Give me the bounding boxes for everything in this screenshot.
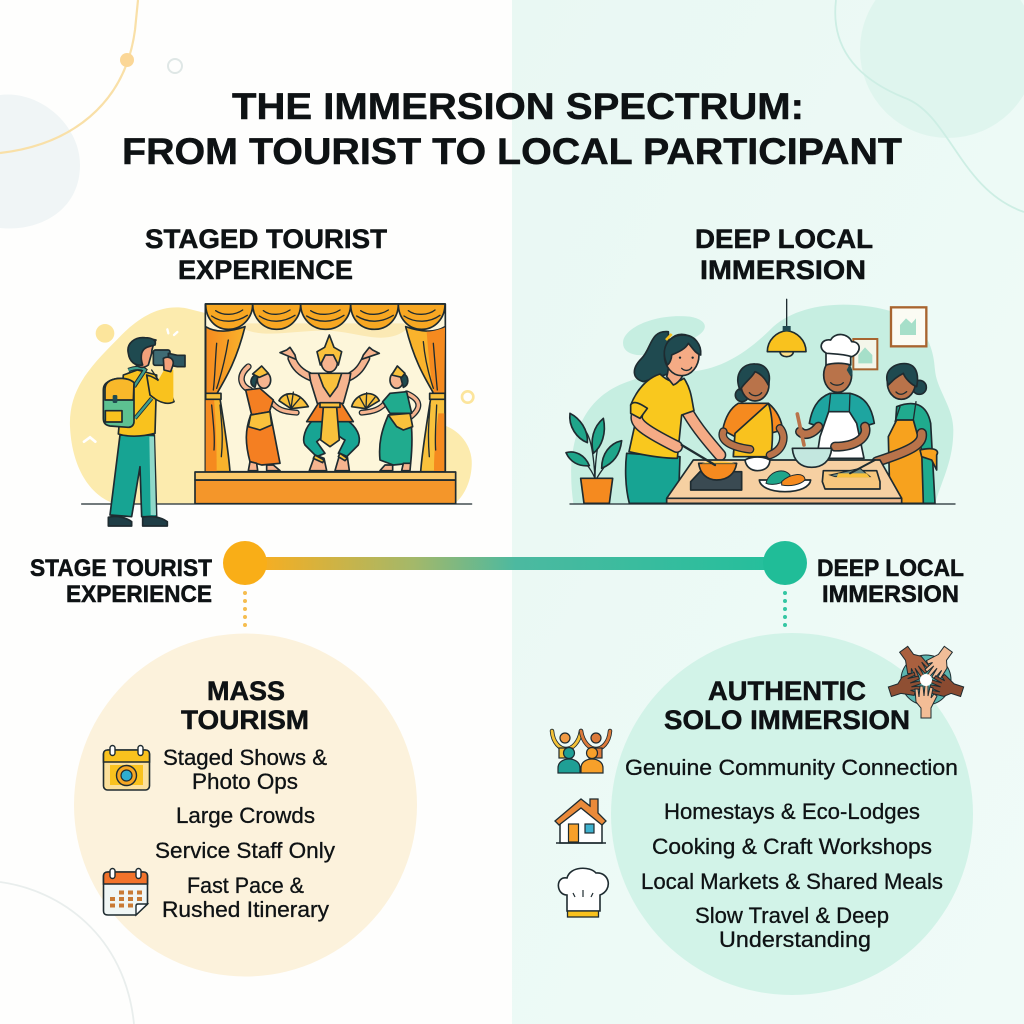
heading: deep local immersion bbox=[695, 224, 873, 285]
immersion list: Cooking & Craft Workshops bbox=[652, 834, 932, 859]
heading: deep local immersion: DEEP LOCAL bbox=[695, 224, 873, 254]
right dancer bbox=[352, 366, 418, 471]
picture frames bbox=[853, 307, 926, 369]
illustration: community cooking together bbox=[566, 299, 955, 504]
woman in yellow shirt bbox=[626, 332, 720, 503]
mass tourism heading: TOURISM bbox=[181, 705, 309, 735]
spectrum label right bbox=[817, 555, 964, 608]
immersion list: Understanding bbox=[719, 927, 871, 952]
panel: authentic solo immersion bbox=[552, 633, 973, 995]
mass tourism list bbox=[155, 745, 335, 922]
woman in sari bbox=[723, 364, 783, 457]
immersion list: Slow Travel & Deep bbox=[695, 903, 889, 928]
mass tourism list: Large Crowds bbox=[176, 803, 315, 828]
mass tourism heading: MASS bbox=[207, 676, 285, 706]
pendant lamp bbox=[767, 299, 806, 357]
immersion heading: SOLO IMMERSION bbox=[664, 705, 910, 735]
panel: mass tourism bbox=[74, 634, 417, 976]
spectrum label left bbox=[30, 555, 212, 608]
table with dishes bbox=[667, 445, 902, 503]
mass tourism heading bbox=[181, 676, 309, 735]
left dancer bbox=[241, 366, 308, 471]
icon: community people bbox=[552, 731, 610, 773]
icon: camera calendar bbox=[104, 746, 150, 790]
heading: deep local immersion: IMMERSION bbox=[700, 255, 866, 285]
immersion list bbox=[625, 755, 958, 952]
immersion list: Homestays & Eco-Lodges bbox=[664, 799, 920, 824]
immersion heading: AUTHENTIC bbox=[708, 676, 866, 706]
spectrum line bbox=[223, 541, 807, 628]
immersion list: Local Markets & Shared Meals bbox=[641, 869, 943, 894]
curtain valance bbox=[206, 304, 445, 329]
photographer with backpack bbox=[103, 338, 185, 526]
heading: staged tourist experience: EXPERIENCE bbox=[178, 255, 353, 285]
title: THE IMMERSION SPECTRUM: bbox=[232, 86, 804, 127]
stage platform bbox=[195, 472, 456, 504]
spectrum label right: DEEP LOCAL bbox=[817, 555, 964, 582]
chef with apron bbox=[797, 335, 874, 458]
mass tourism list: Rushed Itinerary bbox=[162, 897, 329, 922]
mass tourism list: Photo Ops bbox=[192, 769, 298, 794]
title: FROM TOURIST TO LOCAL PARTICIPANT bbox=[122, 131, 902, 172]
immersion list: Genuine Community Connection bbox=[625, 755, 958, 780]
heading: staged tourist experience bbox=[145, 224, 388, 285]
mass tourism list: Fast Pace & bbox=[187, 873, 304, 898]
icon: calendar bbox=[104, 868, 148, 915]
mass tourism list: Staged Shows & bbox=[163, 745, 327, 770]
spectrum label left: STAGE TOURIST bbox=[30, 555, 212, 582]
centre dancer bbox=[280, 335, 379, 471]
immersion heading bbox=[664, 676, 910, 735]
icon: chef hat bbox=[558, 868, 608, 917]
right spectrum node bbox=[763, 541, 807, 585]
woman in orange apron bbox=[877, 364, 938, 503]
title bbox=[122, 86, 902, 172]
illustration: tourist photographing staged dance show bbox=[70, 304, 473, 526]
icon: house bbox=[555, 799, 606, 843]
left spectrum node bbox=[223, 541, 267, 585]
mass tourism list: Service Staff Only bbox=[155, 838, 335, 863]
stage frame bbox=[205, 304, 445, 472]
heading: staged tourist experience: STAGED TOURIST bbox=[145, 224, 388, 254]
icon: joined hands bbox=[886, 643, 966, 718]
spectrum label left: EXPERIENCE bbox=[66, 581, 212, 608]
spectrum label right: IMMERSION bbox=[822, 581, 959, 608]
plant bbox=[566, 413, 622, 503]
